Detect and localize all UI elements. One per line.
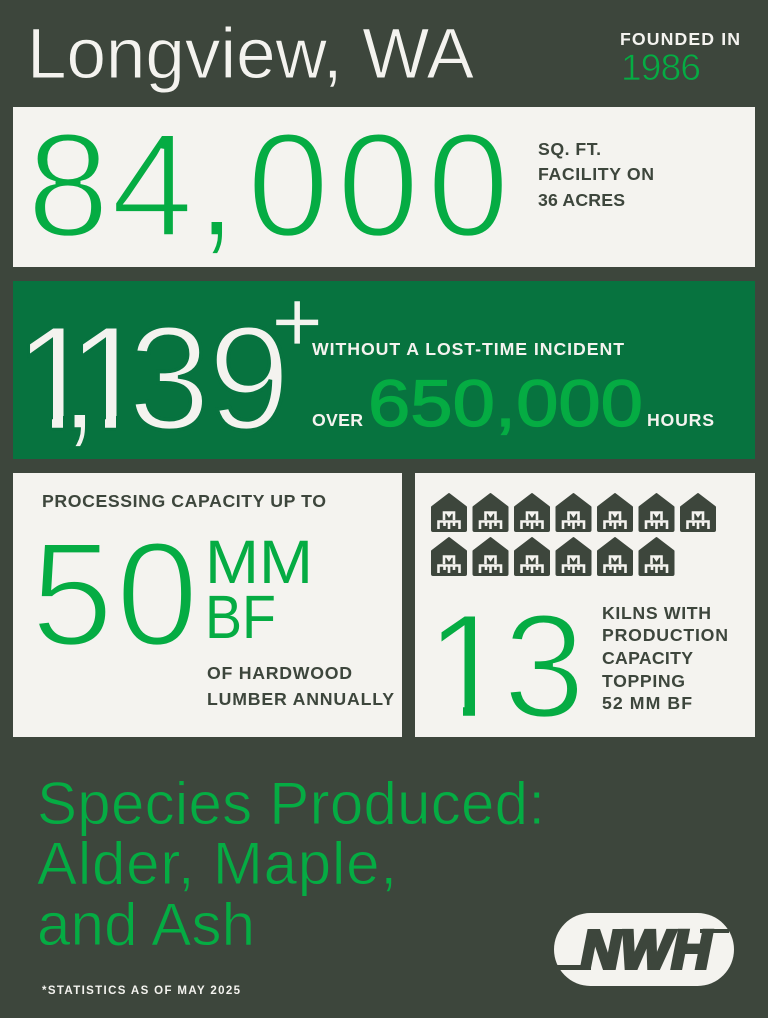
hours number: 650,000 (368, 366, 643, 440)
big number 50: 50 (31, 512, 198, 677)
founded in label (620, 29, 740, 88)
founded in label: FOUNDED IN (620, 29, 740, 49)
big number 1,139 (30, 328, 282, 446)
safety text: WITHOUT A LOST-TIME INCIDENT (312, 339, 624, 359)
plus sign: + (272, 272, 323, 371)
big number 1,139: , (59, 296, 100, 461)
capacity description: OF HARDWOOD (207, 663, 352, 683)
hours label: HOURS (647, 410, 714, 430)
panel: processing capacity (13, 473, 402, 737)
facility description (538, 139, 654, 210)
kiln description (602, 603, 728, 713)
big number 13 (442, 616, 577, 717)
icon: kiln row (432, 494, 715, 575)
logo: NWH: NWH (581, 920, 712, 980)
panel: facility size (13, 103, 755, 268)
species heading (37, 770, 545, 958)
unit MM BF (205, 528, 313, 652)
big number 13: 1 (426, 584, 508, 749)
panel: safety record (13, 272, 755, 461)
species heading: Alder, Maple, (37, 830, 397, 897)
kiln description: KILNS WITH (602, 603, 711, 623)
species heading: and Ash (37, 891, 255, 958)
big number 13: 3 (503, 584, 585, 749)
kiln description: CAPACITY (602, 648, 693, 668)
big number 1,139: 1 (68, 296, 150, 461)
kiln description: PRODUCTION (602, 625, 728, 645)
logo: NWH (554, 913, 734, 986)
unit MM BF: MM (205, 528, 313, 597)
founding year: 1986 (621, 47, 701, 88)
facility description: FACILITY ON (538, 164, 654, 184)
facility description: 36 ACRES (538, 190, 625, 210)
kiln description: 52 MM BF (602, 693, 692, 713)
footnote: *STATISTICS AS OF MAY 2025 (42, 985, 241, 997)
big number 84,000: 84,000 (27, 103, 509, 268)
capacity description (207, 663, 394, 709)
unit MM BF: BF (205, 583, 276, 652)
capacity description: LUMBER ANNUALLY (207, 689, 394, 709)
kiln description: TOPPING (602, 671, 685, 691)
big number 1,139: 39 (128, 296, 290, 461)
panel: kilns (415, 473, 755, 749)
big number 1,139: 1 (14, 296, 97, 461)
over label: OVER (312, 410, 363, 430)
capacity heading: PROCESSING CAPACITY UP TO (42, 491, 326, 511)
title: Longview, WA (27, 15, 475, 94)
facility description: SQ. FT. (538, 139, 601, 159)
species heading: Species Produced: (37, 770, 545, 837)
